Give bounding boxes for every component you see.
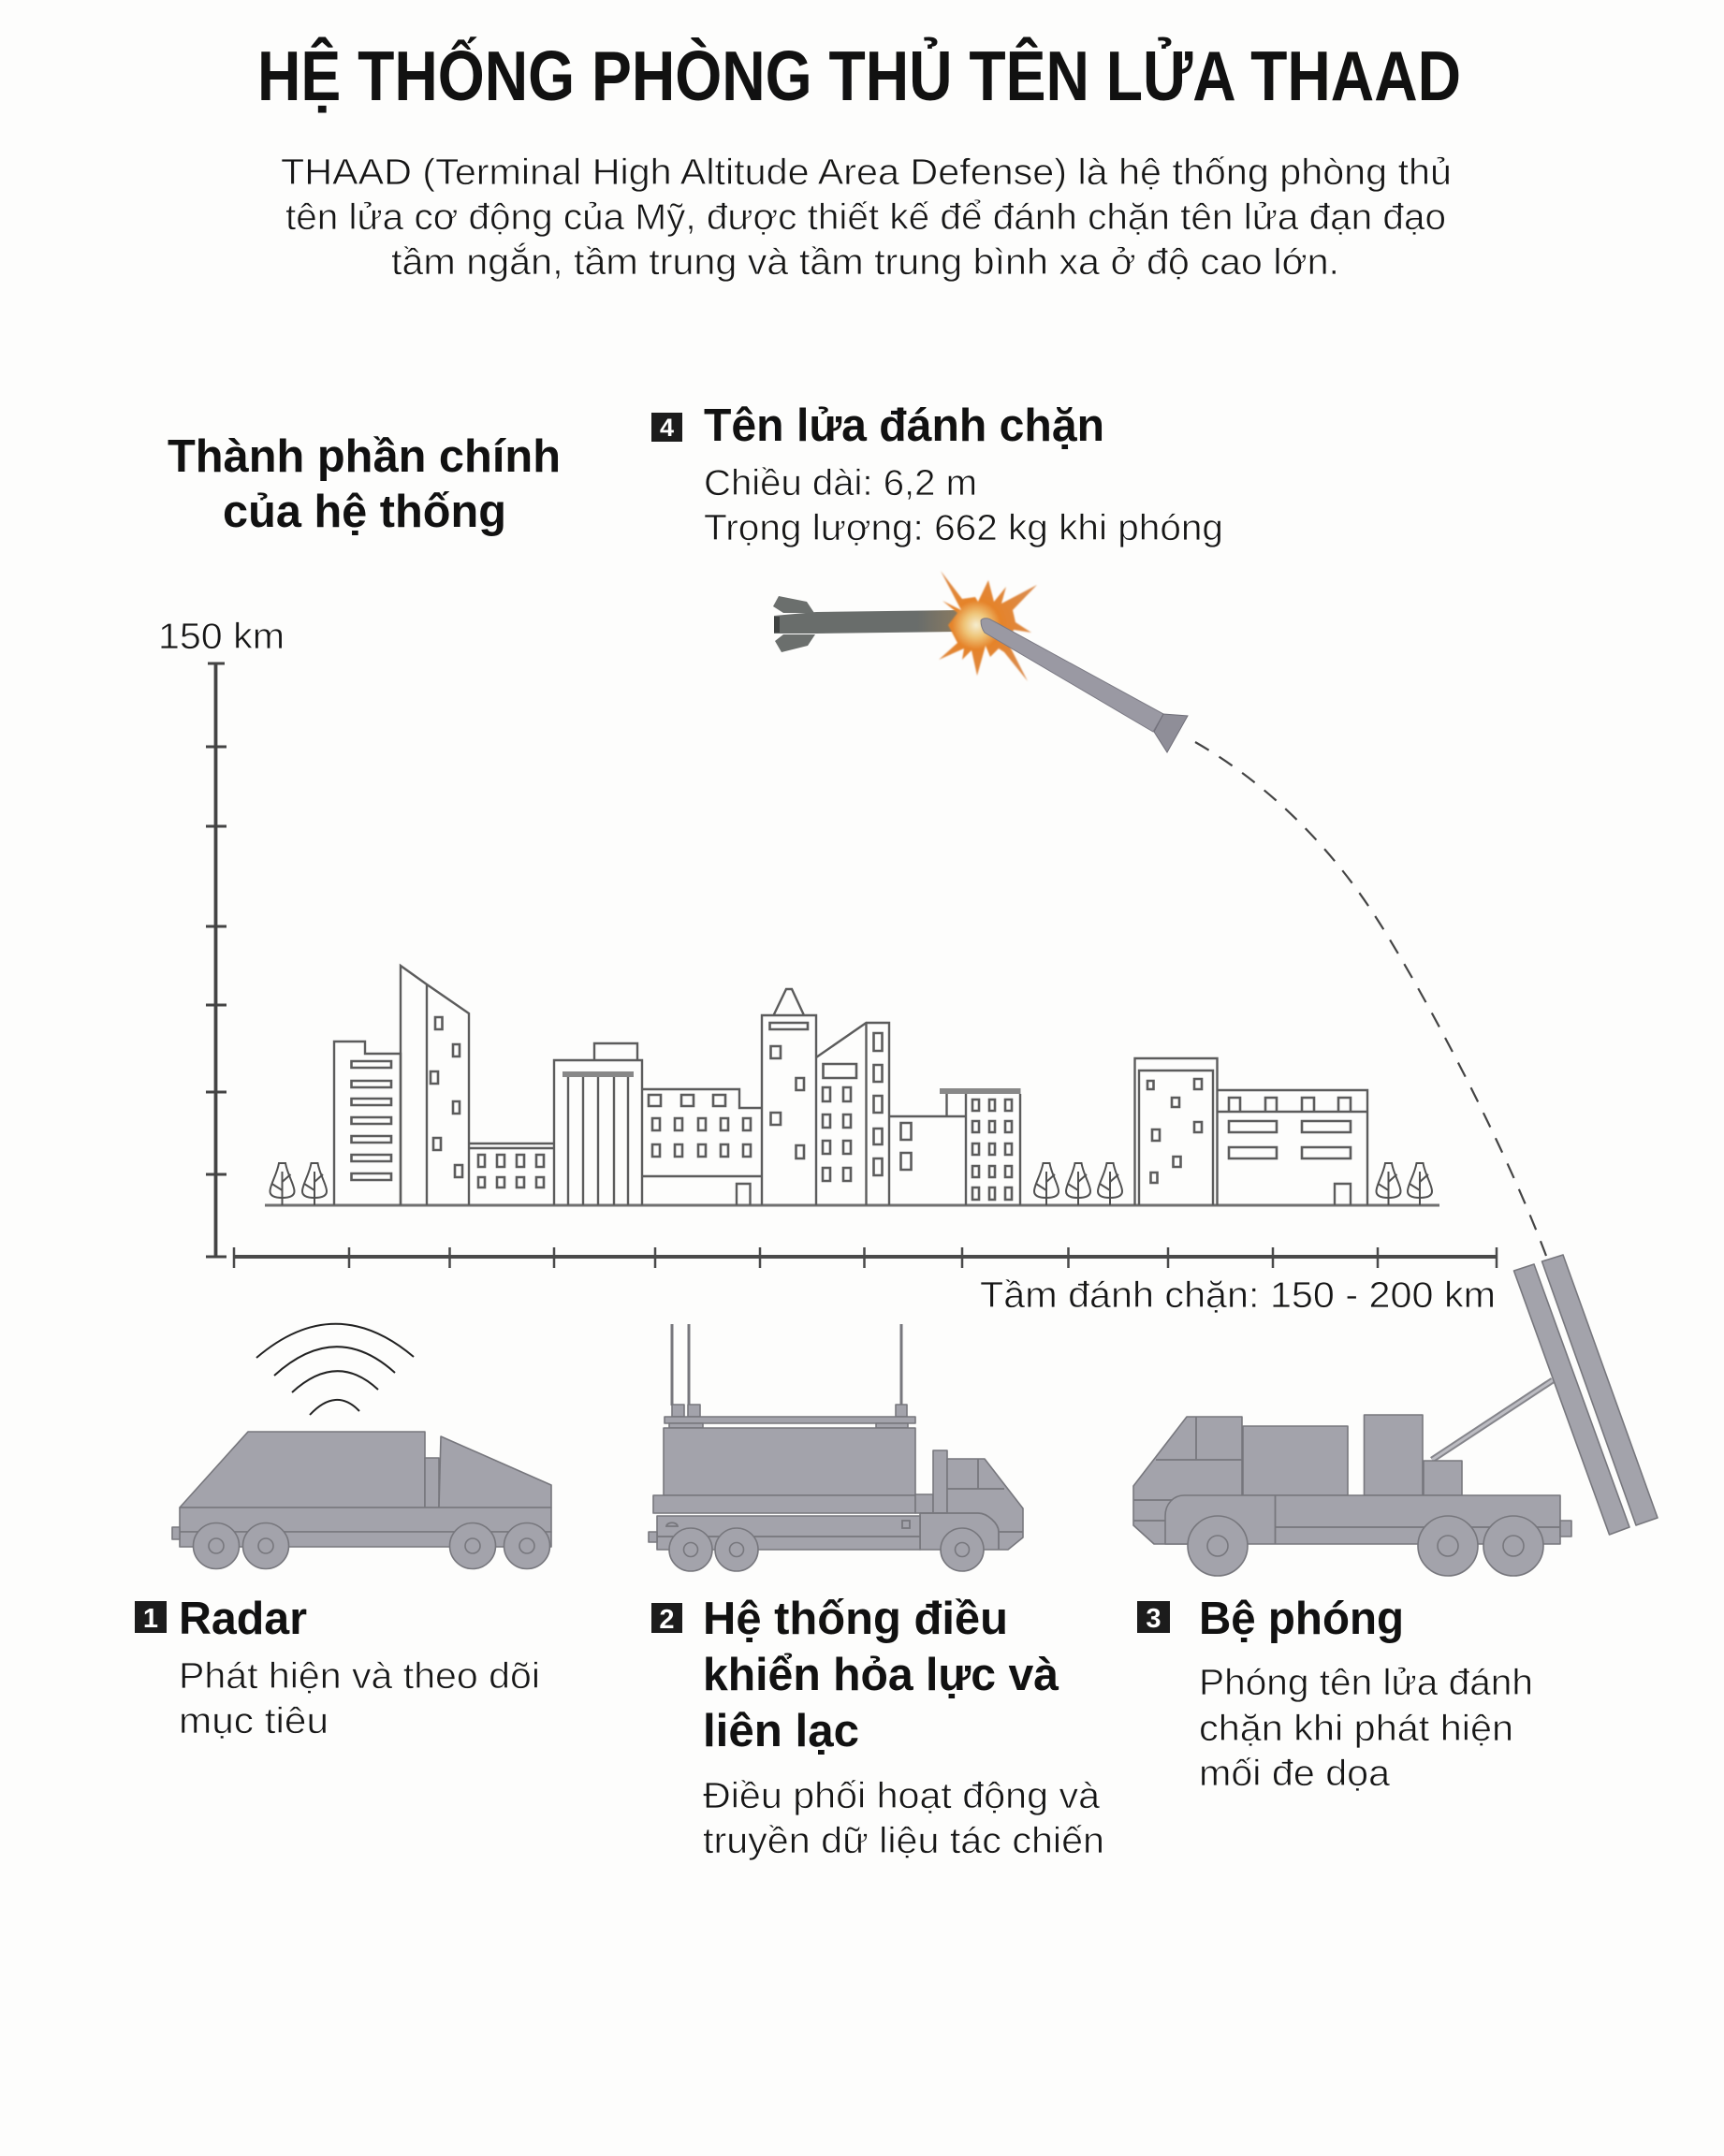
- interceptor specs: Chiều dài: 6,2 m: [704, 463, 977, 503]
- icon: number 1: 1: [143, 1604, 158, 1634]
- icon: number 1: [135, 1601, 167, 1634]
- launcher description: Phóng tên lửa đánh: [1199, 1663, 1533, 1703]
- ground line: [265, 1203, 1439, 1207]
- radar description: mục tiêu: [179, 1701, 329, 1741]
- trajectory dashed line: [1195, 742, 1546, 1256]
- intro text: tên lửa cơ động của Mỹ, được thiết kế để đánh chặn tên lửa đạn đạo: [285, 197, 1446, 238]
- intro text: tầm ngắn, tầm trung và tầm trung bình xa ở độ cao lớn.: [391, 242, 1339, 283]
- icon: number 3: 3: [1146, 1604, 1162, 1634]
- command description: truyền dữ liệu tác chiến: [703, 1821, 1104, 1861]
- radar truck wheels: [193, 1523, 550, 1568]
- altitude label: 150 km: [158, 617, 285, 657]
- radar waves: [256, 1324, 414, 1415]
- intro text: THAAD (Terminal High Altitude Area Defense) là hệ thống phòng thủ: [281, 153, 1452, 193]
- command truck wheels: [669, 1528, 984, 1571]
- building group right: [1134, 1058, 1367, 1205]
- launcher wheels: [1188, 1516, 1543, 1576]
- launcher strut: [1432, 1380, 1553, 1460]
- interceptor missile: [981, 619, 1188, 752]
- heading: main components: [168, 431, 561, 537]
- radar description: Phát hiện và theo dõi: [179, 1656, 540, 1697]
- interceptor specs: [704, 463, 1223, 548]
- heading: fire control: Hệ thống điều: [703, 1594, 1008, 1644]
- interceptor specs: Trọng lượng: 662 kg khi phóng: [704, 508, 1223, 548]
- trees row: [270, 1163, 1432, 1205]
- heading: launcher: Bệ phóng: [1199, 1594, 1404, 1644]
- item 1: radar text: [135, 1594, 540, 1741]
- heading: fire control: [703, 1594, 1059, 1756]
- heading: fire control: khiển hỏa lực và: [703, 1650, 1059, 1700]
- item 3: launcher text: [1137, 1594, 1533, 1794]
- title: HỆ THỐNG PHÒNG THỦ TÊN LỬA THAAD: [257, 36, 1461, 115]
- launcher description: chặn khi phát hiện: [1199, 1709, 1513, 1749]
- icon: number 3: [1137, 1601, 1170, 1634]
- icon: number 2: [651, 1603, 682, 1635]
- icon: number 2: 2: [659, 1605, 675, 1635]
- launcher description: [1199, 1663, 1533, 1794]
- command description: [703, 1776, 1104, 1861]
- command truck: [649, 1324, 1023, 1571]
- launcher description: mối đe dọa: [1199, 1754, 1390, 1794]
- building group left: [334, 966, 1020, 1205]
- command description: Điều phối hoạt động và: [703, 1776, 1100, 1816]
- item 2: command text: [651, 1594, 1104, 1861]
- radar truck: [172, 1324, 551, 1568]
- icon: number 4: 4: [660, 414, 674, 442]
- range label: Tầm đánh chặn: 150 - 200 km: [980, 1275, 1496, 1316]
- icon: number 4: [651, 413, 682, 442]
- altitude axis: [206, 663, 226, 1257]
- range axis: [234, 1247, 1497, 1268]
- heading: radar: Radar: [179, 1594, 307, 1644]
- heading: fire control: liên lạc: [703, 1706, 859, 1756]
- launcher truck: [1133, 1255, 1658, 1576]
- intro text: [281, 153, 1452, 283]
- item 4: interceptor text: [651, 401, 1223, 548]
- heading: main components: của hệ thống: [223, 487, 506, 537]
- heading: main components: Thành phần chính: [168, 431, 561, 482]
- launcher tubes: [1514, 1255, 1658, 1535]
- radar description: [179, 1656, 540, 1741]
- heading: interceptor: Tên lửa đánh chặn: [704, 401, 1104, 451]
- explosion: [939, 571, 1037, 681]
- threat missile: [773, 596, 959, 652]
- city skyline: [265, 966, 1439, 1205]
